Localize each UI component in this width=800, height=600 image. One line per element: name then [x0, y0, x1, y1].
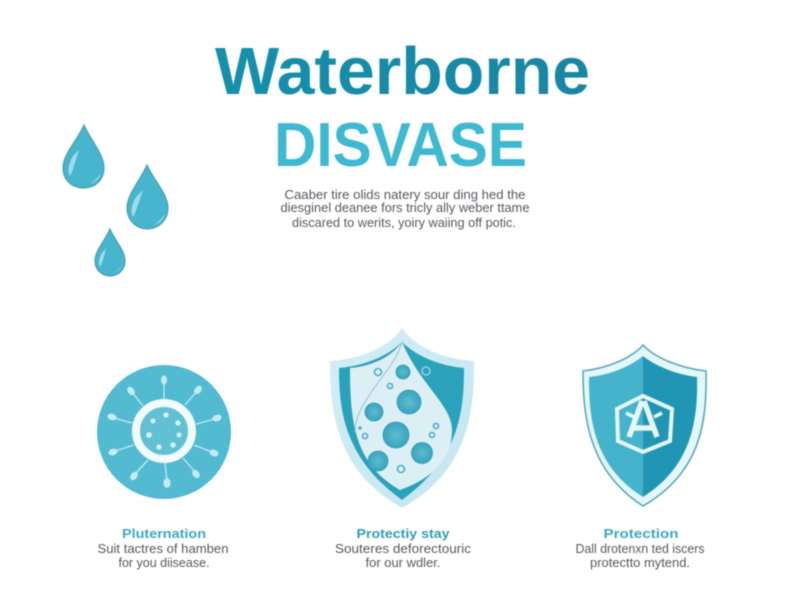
core dots	[146, 412, 182, 450]
bubbles	[365, 365, 432, 471]
title	[215, 34, 590, 180]
column text: protection	[576, 526, 704, 570]
column text: pluternation: Pluternation	[122, 526, 206, 541]
column text: protection: Protection	[604, 526, 679, 541]
shield right half	[643, 356, 697, 497]
icon: large drop left	[63, 125, 104, 188]
icon: small drop	[95, 229, 125, 276]
column text: protectiy stay	[335, 526, 471, 570]
intro text block: Caaber tire olids natery sour ding hed the	[284, 187, 526, 202]
shield left half	[589, 356, 643, 497]
column text: protectiy stay: for our wdler.	[366, 556, 440, 570]
shield outer	[330, 328, 474, 508]
column text: pluternation: for you diisease.	[118, 556, 210, 570]
icon: pathogen circle	[97, 365, 231, 499]
column text: protectiy stay: Souteres deforectouric	[335, 542, 471, 556]
intro text block: diesginel deanee fors tricly ally weber ttame	[280, 200, 530, 215]
icon: emblem shield	[583, 345, 706, 506]
column text: pluternation	[98, 526, 229, 570]
column text: pluternation: Suit tactres of hamben	[98, 542, 229, 556]
icon: water drop shield	[330, 328, 474, 508]
column text: protectiy stay: Protectiy stay	[356, 526, 450, 541]
icon: water drops	[63, 125, 168, 276]
column text: protection: Dall drotenxn ted iscers	[576, 542, 704, 556]
column text: protection: protectto mytend.	[590, 556, 690, 570]
shield inner pale with drop	[350, 342, 452, 490]
title: DISVASE	[274, 111, 527, 180]
icon: large drop right	[127, 165, 168, 229]
intro text block	[280, 187, 530, 230]
shield border	[583, 345, 706, 506]
hexagon emblem	[617, 396, 672, 452]
spikes	[107, 376, 222, 487]
shield inner band	[339, 342, 464, 500]
title: Waterborne	[215, 34, 590, 109]
ring	[136, 403, 192, 459]
drop outline	[355, 342, 402, 432]
intro text block: discared to werits, yoiry waiing off potic.	[292, 215, 516, 230]
